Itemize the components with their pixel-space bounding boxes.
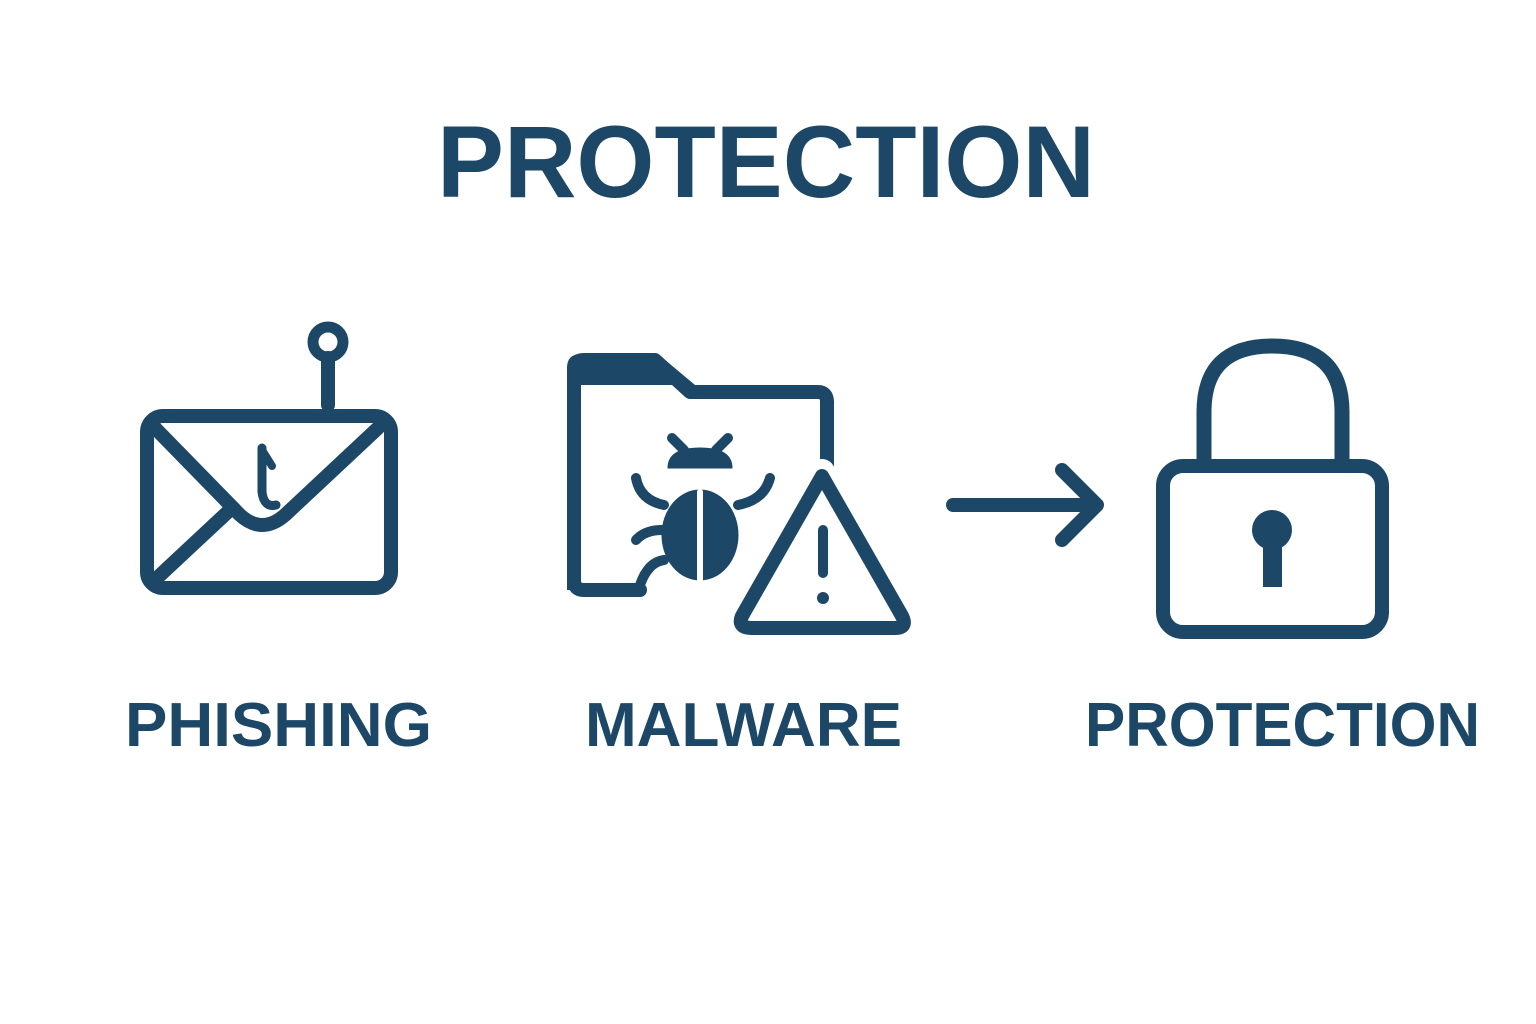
- label: malware: MALWARE: [585, 691, 902, 760]
- title: PROTECTION: [437, 105, 1095, 219]
- label: protection: PROTECTION: [1085, 691, 1480, 760]
- arrow: [953, 470, 1097, 540]
- icon: malware folder with bug and warning: [567, 354, 906, 632]
- label: phishing: PHISHING: [125, 691, 432, 760]
- icon: phishing envelope: [147, 327, 391, 588]
- icon: padlock: [1163, 346, 1382, 632]
- bug: [636, 438, 770, 585]
